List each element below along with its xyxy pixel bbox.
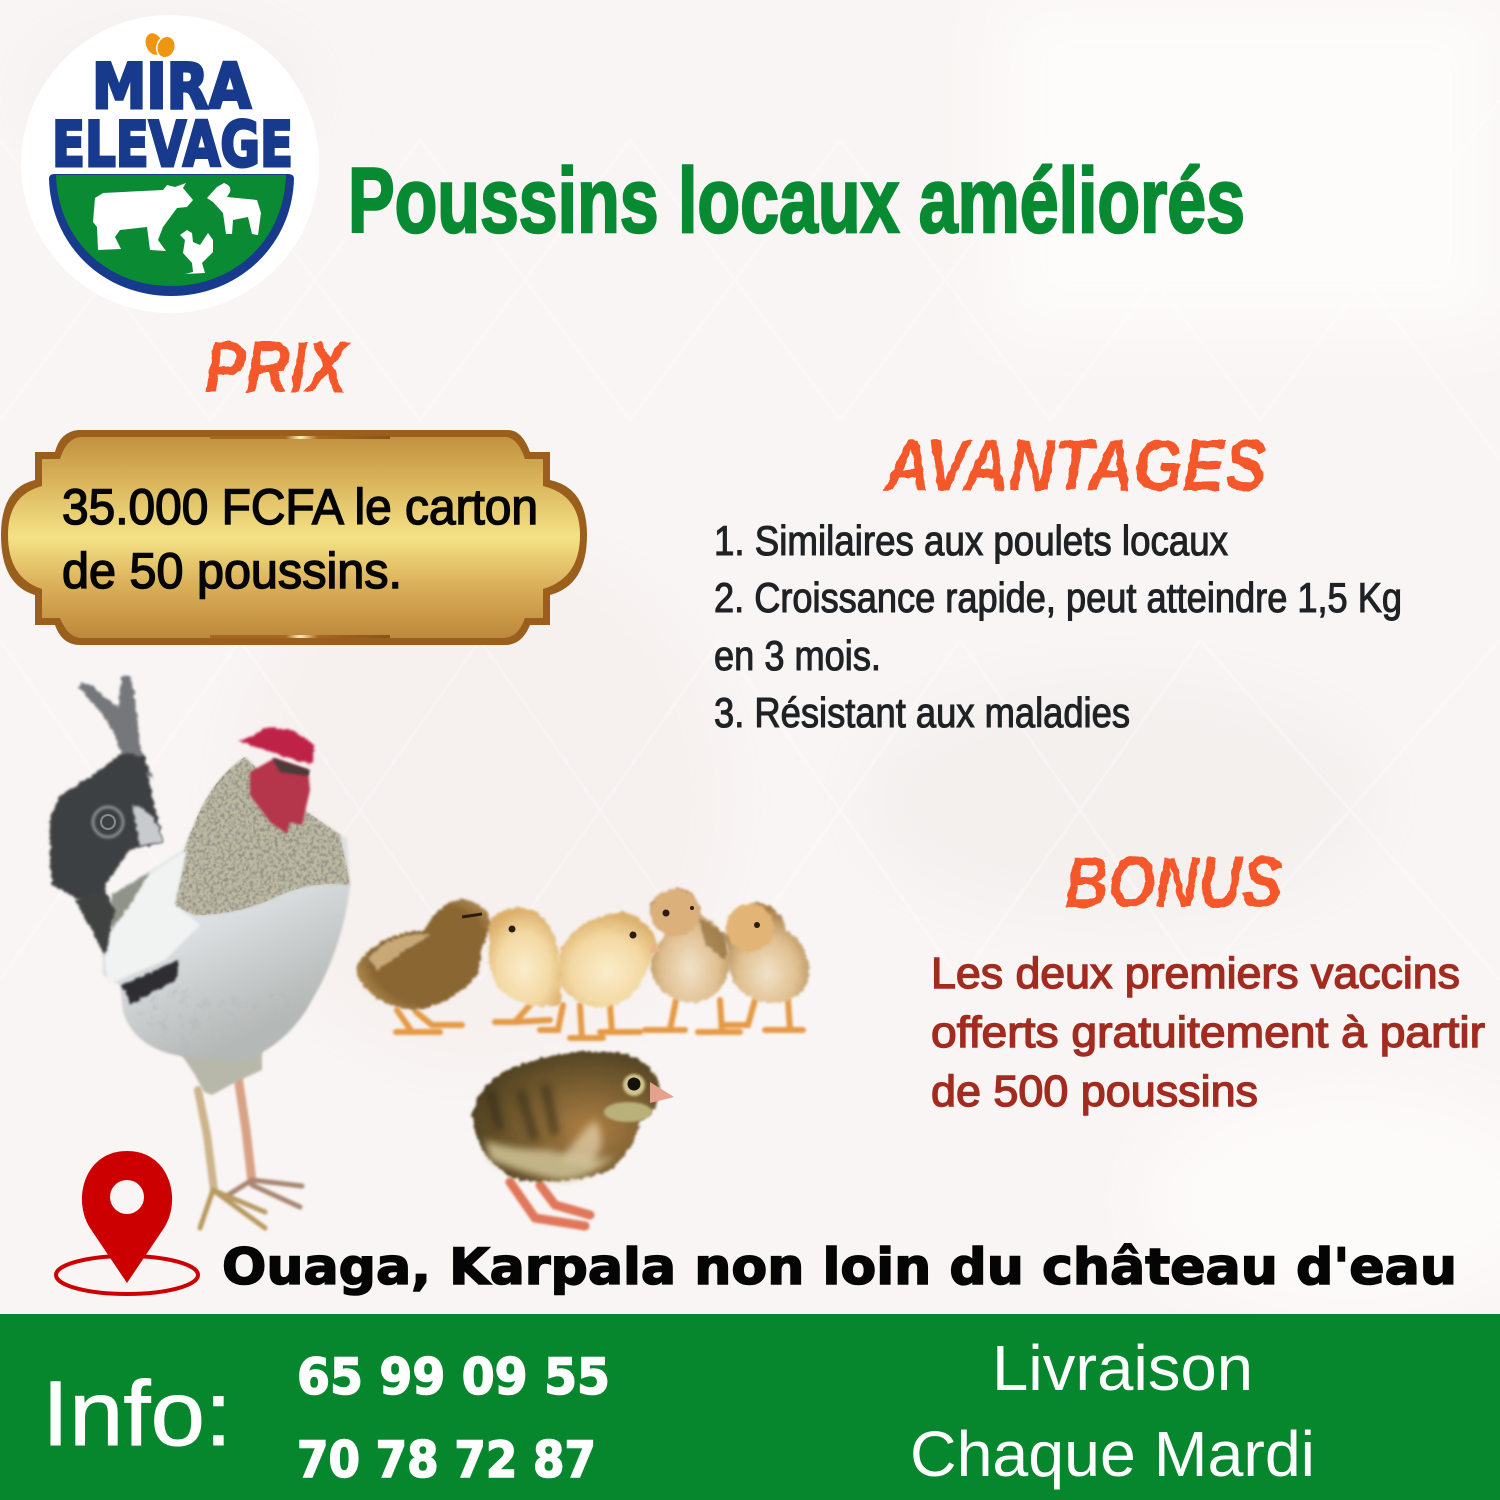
bonus text: Les deux premiers vaccins [931, 949, 1460, 998]
chick 3 [557, 912, 658, 1007]
chick 2 [487, 908, 561, 1007]
icon: location pin [56, 1151, 198, 1294]
logo wordmark: MIRA: MIRA [92, 50, 251, 123]
bonus text: offerts gratuitement à partir [931, 1008, 1485, 1057]
chick 4 [650, 888, 730, 1003]
location text: Ouaga, Karpala non loin du château d'eau [222, 1238, 1457, 1296]
illustration: group of five chicks [357, 888, 809, 1038]
logo wordmark: ELEVAGE: ELEVAGE [52, 108, 293, 181]
illustration: rooster [50, 676, 350, 1228]
icon: ram [207, 183, 261, 235]
bonus text: de 500 poussins [931, 1067, 1258, 1116]
icon: hen [180, 230, 213, 274]
delivery text: Chaque Mardi [910, 1418, 1315, 1490]
heading: BONUS: BONUS [1065, 843, 1282, 923]
footer label: Info: Info: [42, 1363, 232, 1465]
list of advantages: 2. Croissance rapide, peut atteindre 1,5 Kg [714, 574, 1402, 621]
quail beak [650, 1082, 674, 1103]
quail head detail [604, 1102, 652, 1122]
bonus text [931, 949, 1485, 1116]
rooster tail feathers [78, 676, 153, 780]
heading: AVANTAGES: AVANTAGES [883, 426, 1267, 506]
price text: 35.000 FCFA le carton [62, 479, 538, 535]
quail body [472, 1051, 660, 1181]
rooster legs [198, 1070, 302, 1228]
chick legs [396, 1000, 803, 1038]
icon: cow [93, 183, 193, 251]
chick 5 [726, 903, 809, 1003]
rooster head and wattles [250, 758, 310, 834]
chick 1 [357, 899, 490, 1010]
price text: de 50 poussins. [62, 543, 402, 599]
list of advantages: en 3 mois. [714, 632, 881, 679]
rooster body [102, 757, 350, 1060]
price text [62, 479, 538, 599]
rooster neck hackle [172, 757, 350, 915]
list of advantages [714, 517, 1402, 736]
rooster thighs [175, 1045, 262, 1095]
list of advantages: 1. Similaires aux poulets locaux [714, 517, 1228, 564]
phone numbers: 70 78 72 87 [297, 1431, 596, 1489]
footer band [0, 1314, 1500, 1500]
rooster comb [238, 727, 315, 765]
phone numbers: 65 99 09 55 [297, 1348, 610, 1406]
logo shield with farm animals [49, 174, 294, 296]
quail legs [510, 1182, 590, 1226]
illustration: quail chick [472, 1051, 674, 1226]
icon: two orange eggs [143, 31, 178, 60]
logo: Mira Elevage [21, 15, 319, 313]
title: Poussins locaux améliorés [348, 150, 1245, 252]
phone numbers [297, 1348, 610, 1489]
rooster wing [104, 850, 200, 985]
delivery text: Livraison [992, 1332, 1253, 1404]
price plaque [1, 430, 587, 645]
delivery text [910, 1332, 1315, 1490]
list of advantages: 3. Résistant aux maladies [714, 689, 1130, 736]
rooster black tail [50, 752, 163, 930]
heading: PRIX: PRIX [205, 328, 350, 408]
